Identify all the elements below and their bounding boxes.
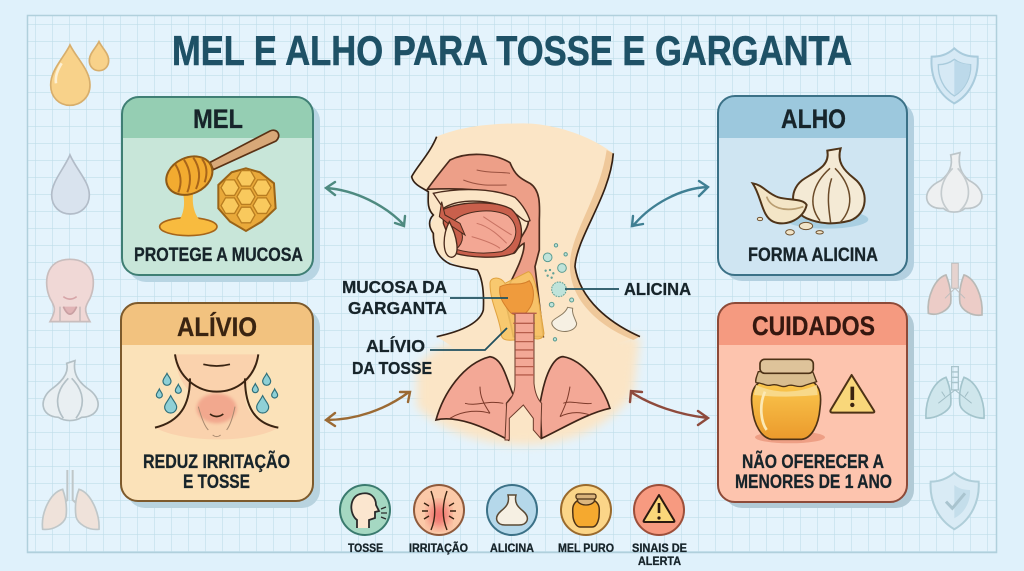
nasal cavity and pharynx — [427, 154, 543, 337]
panel: CUIDADOS — [718, 303, 914, 508]
label: não oferecer a menores de 1 ano: NÃO OFERECER A — [742, 451, 884, 473]
icon: neck with soothing drops — [155, 354, 278, 439]
label: protege a mucosa: PROTEGE A MUCOSA — [134, 245, 303, 266]
legend: irritação: IRRITAÇÃO — [409, 540, 468, 555]
icon: garlic bulb and clove — [753, 148, 868, 235]
icon: honey jar and warning — [752, 359, 874, 443]
legend: tosse: TOSSE — [348, 541, 383, 555]
title: MEL E ALHO PARA TOSSE E GARGANTA — [172, 27, 852, 74]
legend: sinais de alerta — [632, 485, 687, 568]
label: não oferecer a menores de 1 ano: MENORES DE 1 ANO — [735, 472, 892, 493]
icon: honey drops — [51, 42, 109, 105]
allicin particles — [543, 244, 574, 341]
honey coating — [490, 272, 544, 340]
arrow: alívio to throat — [326, 392, 410, 426]
icon: shield — [931, 48, 978, 103]
icon: faded lungs — [42, 470, 99, 529]
legend: sinais de alerta: ALERTA — [638, 554, 681, 568]
panel: ALÍVIO — [121, 303, 320, 508]
label: alívio da tosse: DA TOSSE — [352, 358, 432, 378]
label: mucosa da garganta — [342, 277, 508, 318]
legend: irritação — [409, 485, 468, 555]
anatomy illustration — [412, 123, 640, 445]
icon: water drop — [52, 155, 89, 214]
label: alívio da tosse: ALÍVIO — [366, 335, 425, 356]
icon: garlic — [927, 153, 982, 212]
legend: sinais de alerta: SINAIS DE — [632, 541, 687, 555]
trachea and bronchi — [505, 313, 542, 440]
label: mucosa da garganta: MUCOSA DA — [342, 277, 447, 297]
arrow: mel to throat — [326, 182, 405, 226]
icon: faded garlic — [43, 361, 98, 421]
heading: MEL: MEL — [193, 104, 243, 134]
label: alicina: ALICINA — [624, 279, 691, 299]
palate — [433, 190, 530, 221]
label: não oferecer a menores de 1 ano — [735, 451, 892, 493]
icon: throat head — [47, 259, 93, 322]
label: reduz irritação e tosse: E TOSSE — [183, 472, 250, 493]
legend: mel puro — [558, 485, 614, 555]
heading: ALHO: ALHO — [781, 104, 846, 134]
legend: mel puro: MEL PURO — [558, 541, 614, 555]
label: reduz irritação e tosse: REDUZ IRRITAÇÃO — [143, 451, 290, 473]
label: forma alicina: FORMA ALICINA — [748, 245, 878, 266]
legend: tosse — [340, 485, 390, 555]
icon: blue lungs — [926, 367, 984, 418]
oral cavity and tongue — [439, 202, 521, 257]
heading: CUIDADOS: CUIDADOS — [752, 311, 875, 341]
label: alívio da tosse — [352, 328, 507, 378]
label: mucosa da garganta: GARGANTA — [348, 298, 447, 318]
right side decorative icons — [926, 48, 984, 529]
garlic clove — [552, 307, 577, 331]
arrow: cuidados to throat — [630, 391, 708, 425]
label: reduz irritação e tosse — [143, 451, 290, 493]
left side decorative icons — [42, 42, 109, 529]
icon: pink lungs — [928, 263, 982, 315]
lungs — [436, 357, 610, 440]
face and neck outline — [412, 137, 640, 337]
icon: shield with check — [931, 473, 979, 529]
skin background — [412, 123, 640, 445]
legend: alicina: ALICINA — [490, 541, 534, 555]
heading: ALÍVIO: ALÍVIO — [177, 311, 257, 342]
label: alicina — [565, 279, 691, 299]
arrow: alho to throat — [632, 181, 708, 226]
panel: ALHO — [718, 96, 914, 281]
larynx — [500, 281, 533, 315]
legend: alicina — [487, 485, 537, 555]
icon: honey dipper and honeycomb — [160, 130, 279, 236]
panel: MEL — [122, 97, 320, 282]
